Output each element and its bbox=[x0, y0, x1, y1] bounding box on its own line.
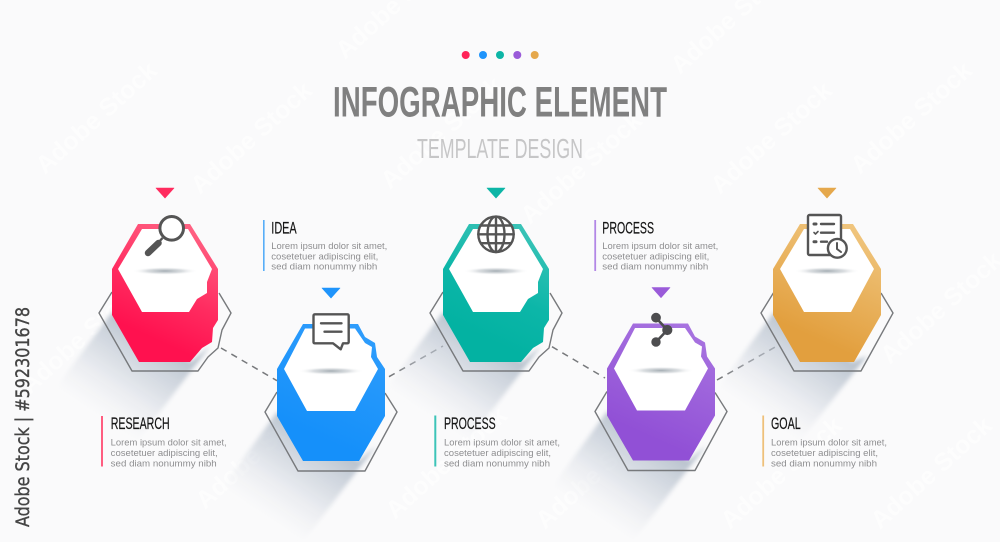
panel: idea hexagon bbox=[216, 324, 397, 542]
white inner hexagon bbox=[780, 229, 874, 312]
long shadow bbox=[216, 412, 376, 542]
watermark: Adobe Stock bbox=[190, 391, 323, 514]
outline hexagon bbox=[99, 292, 231, 371]
text block: research: sed diam nonummy nibh bbox=[111, 458, 217, 468]
icon: share nodes bbox=[652, 313, 672, 346]
text block: goal: cosetetuer adipiscing elit, bbox=[771, 448, 878, 458]
text block: process lower: cosetetuer adipiscing elit, bbox=[444, 448, 551, 458]
watermark: Adobe Stock bbox=[715, 411, 848, 534]
text block: process upper bbox=[594, 219, 718, 272]
watermark: Adobe Stock bbox=[705, 76, 838, 199]
header dots bbox=[462, 51, 539, 59]
panel: goal hexagon bbox=[712, 224, 893, 464]
coloured hexagon bbox=[277, 324, 385, 461]
text block: goal bbox=[762, 415, 887, 468]
subtitle: TEMPLATE DESIGN bbox=[417, 133, 583, 164]
text block: process upper: PROCESS bbox=[602, 219, 654, 237]
text block: idea: sed diam nonummy nibh bbox=[271, 262, 377, 272]
coloured hexagon bbox=[443, 224, 549, 362]
icon: speech bubble bbox=[314, 314, 349, 349]
watermark: Adobe Stock bbox=[530, 411, 663, 534]
outline hexagon bbox=[595, 392, 727, 470]
icon: magnifier bbox=[148, 216, 184, 253]
watermark: Adobe Stock bbox=[375, 71, 508, 194]
coloured hexagon bbox=[607, 324, 715, 460]
text block: idea bbox=[263, 219, 387, 272]
text block: research bbox=[101, 415, 227, 468]
outline hexagon bbox=[761, 292, 893, 371]
marker: red triangle bbox=[156, 188, 174, 198]
text block: idea: cosetetuer adipiscing elit, bbox=[271, 251, 378, 261]
panel: research hexagon bbox=[50, 224, 231, 464]
text block: goal: sed diam nonummy nibh bbox=[771, 458, 877, 468]
white inner hexagon bbox=[284, 328, 378, 411]
text block: goal: GOAL bbox=[771, 415, 801, 433]
watermark: Adobe Stock bbox=[515, 106, 648, 229]
long shadow bbox=[381, 312, 541, 464]
white inner hexagon bbox=[118, 229, 212, 312]
text block: idea: Lorem ipsum dolor sit amet, bbox=[271, 241, 387, 251]
dashed connectors bbox=[221, 346, 777, 381]
text block: process lower: sed diam nonummy nibh bbox=[444, 458, 550, 468]
marker: teal triangle bbox=[487, 188, 505, 198]
text block: process lower: Lorem ipsum dolor sit amet, bbox=[444, 438, 560, 448]
text block: process upper: Lorem ipsum dolor sit amet, bbox=[602, 241, 718, 251]
inner shadow bbox=[132, 267, 198, 275]
watermark: Adobe Stock bbox=[845, 56, 978, 179]
text block: research: Lorem ipsum dolor sit amet, bbox=[111, 438, 227, 448]
watermark: Adobe Stock bbox=[30, 56, 163, 179]
icon: globe bbox=[478, 217, 514, 252]
icon: checklist with clock bbox=[808, 215, 847, 258]
text block: process lower bbox=[434, 415, 560, 468]
text block: goal: Lorem ipsum dolor sit amet, bbox=[771, 438, 887, 448]
stock id vertical label: Adobe Stock | #592301678 bbox=[13, 307, 34, 527]
text block: process lower: PROCESS bbox=[444, 415, 496, 433]
inner shadow bbox=[794, 267, 860, 275]
panel: process purple hexagon bbox=[546, 324, 727, 542]
watermark: Adobe Stock bbox=[15, 276, 148, 399]
long shadow bbox=[712, 312, 867, 464]
marker: gold triangle bbox=[818, 188, 836, 198]
long shadow bbox=[546, 412, 706, 542]
white inner hexagon bbox=[449, 229, 543, 312]
coloured hexagon bbox=[773, 224, 881, 362]
coloured hexagon bbox=[112, 224, 218, 362]
inner shadow bbox=[463, 267, 529, 275]
outline hexagon bbox=[265, 392, 397, 471]
marker: blue triangle bbox=[322, 288, 340, 298]
watermark: Adobe Stock bbox=[185, 76, 318, 199]
marker: purple triangle bbox=[652, 288, 670, 298]
text block: process upper: sed diam nonummy nibh bbox=[602, 262, 708, 272]
text block: research: RESEARCH bbox=[111, 415, 170, 433]
white inner hexagon bbox=[614, 328, 708, 410]
text block: idea: IDEA bbox=[271, 219, 297, 237]
text block: research: cosetetuer adipiscing elit, bbox=[111, 448, 218, 458]
watermark: Adobe Stock bbox=[865, 411, 998, 534]
inner shadow bbox=[298, 367, 364, 375]
panel: process teal hexagon bbox=[381, 224, 562, 464]
watermark: Adobe Stock bbox=[380, 401, 513, 524]
long shadow bbox=[50, 312, 210, 464]
title: INFOGRAPHIC ELEMENT bbox=[333, 79, 667, 127]
inner shadow bbox=[628, 366, 694, 374]
text block: process upper: cosetetuer adipiscing elit, bbox=[602, 251, 709, 261]
outline hexagon bbox=[430, 292, 562, 371]
